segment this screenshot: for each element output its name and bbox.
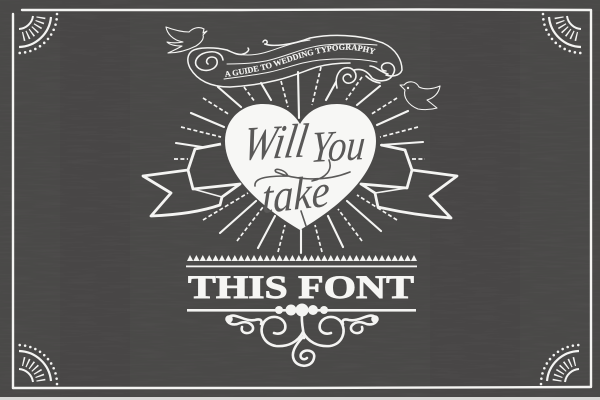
divider above title bbox=[186, 266, 417, 267]
triangle row bbox=[187, 255, 417, 261]
corner sunburst: top right bbox=[543, 14, 582, 53]
bottom flourish bbox=[226, 314, 378, 366]
script text: You: You bbox=[309, 120, 367, 172]
script text: take: take bbox=[262, 165, 330, 223]
right ribbon bbox=[361, 145, 457, 218]
title: THIS FONT: THIS FONT bbox=[188, 270, 414, 306]
banner second top line bbox=[227, 40, 310, 55]
dashed sunburst rays bbox=[174, 67, 425, 252]
left spiral bbox=[196, 52, 223, 70]
divider with dots bbox=[187, 304, 416, 316]
banner inner top rule bbox=[227, 44, 377, 64]
corner sunburst: bottom right bbox=[541, 345, 580, 384]
left ribbon bbox=[143, 144, 240, 216]
banner inner bottom rule bbox=[224, 59, 377, 79]
banner outline bbox=[188, 35, 402, 87]
corner sunburst: top left bbox=[18, 14, 57, 53]
right spiral cluster bbox=[336, 63, 394, 88]
heart with script title bbox=[225, 104, 376, 230]
icon: left bird bbox=[166, 27, 207, 53]
script text: Will: Will bbox=[239, 115, 312, 171]
top banner scroll bbox=[188, 35, 402, 88]
script swash bbox=[255, 160, 350, 226]
solid sunburst rays bbox=[176, 72, 423, 253]
icon: right bird bbox=[400, 82, 440, 110]
banner text: A GUIDE TO WEDDING TYPOGRAPHY bbox=[225, 44, 376, 78]
corner sunburst: bottom left bbox=[18, 345, 57, 384]
